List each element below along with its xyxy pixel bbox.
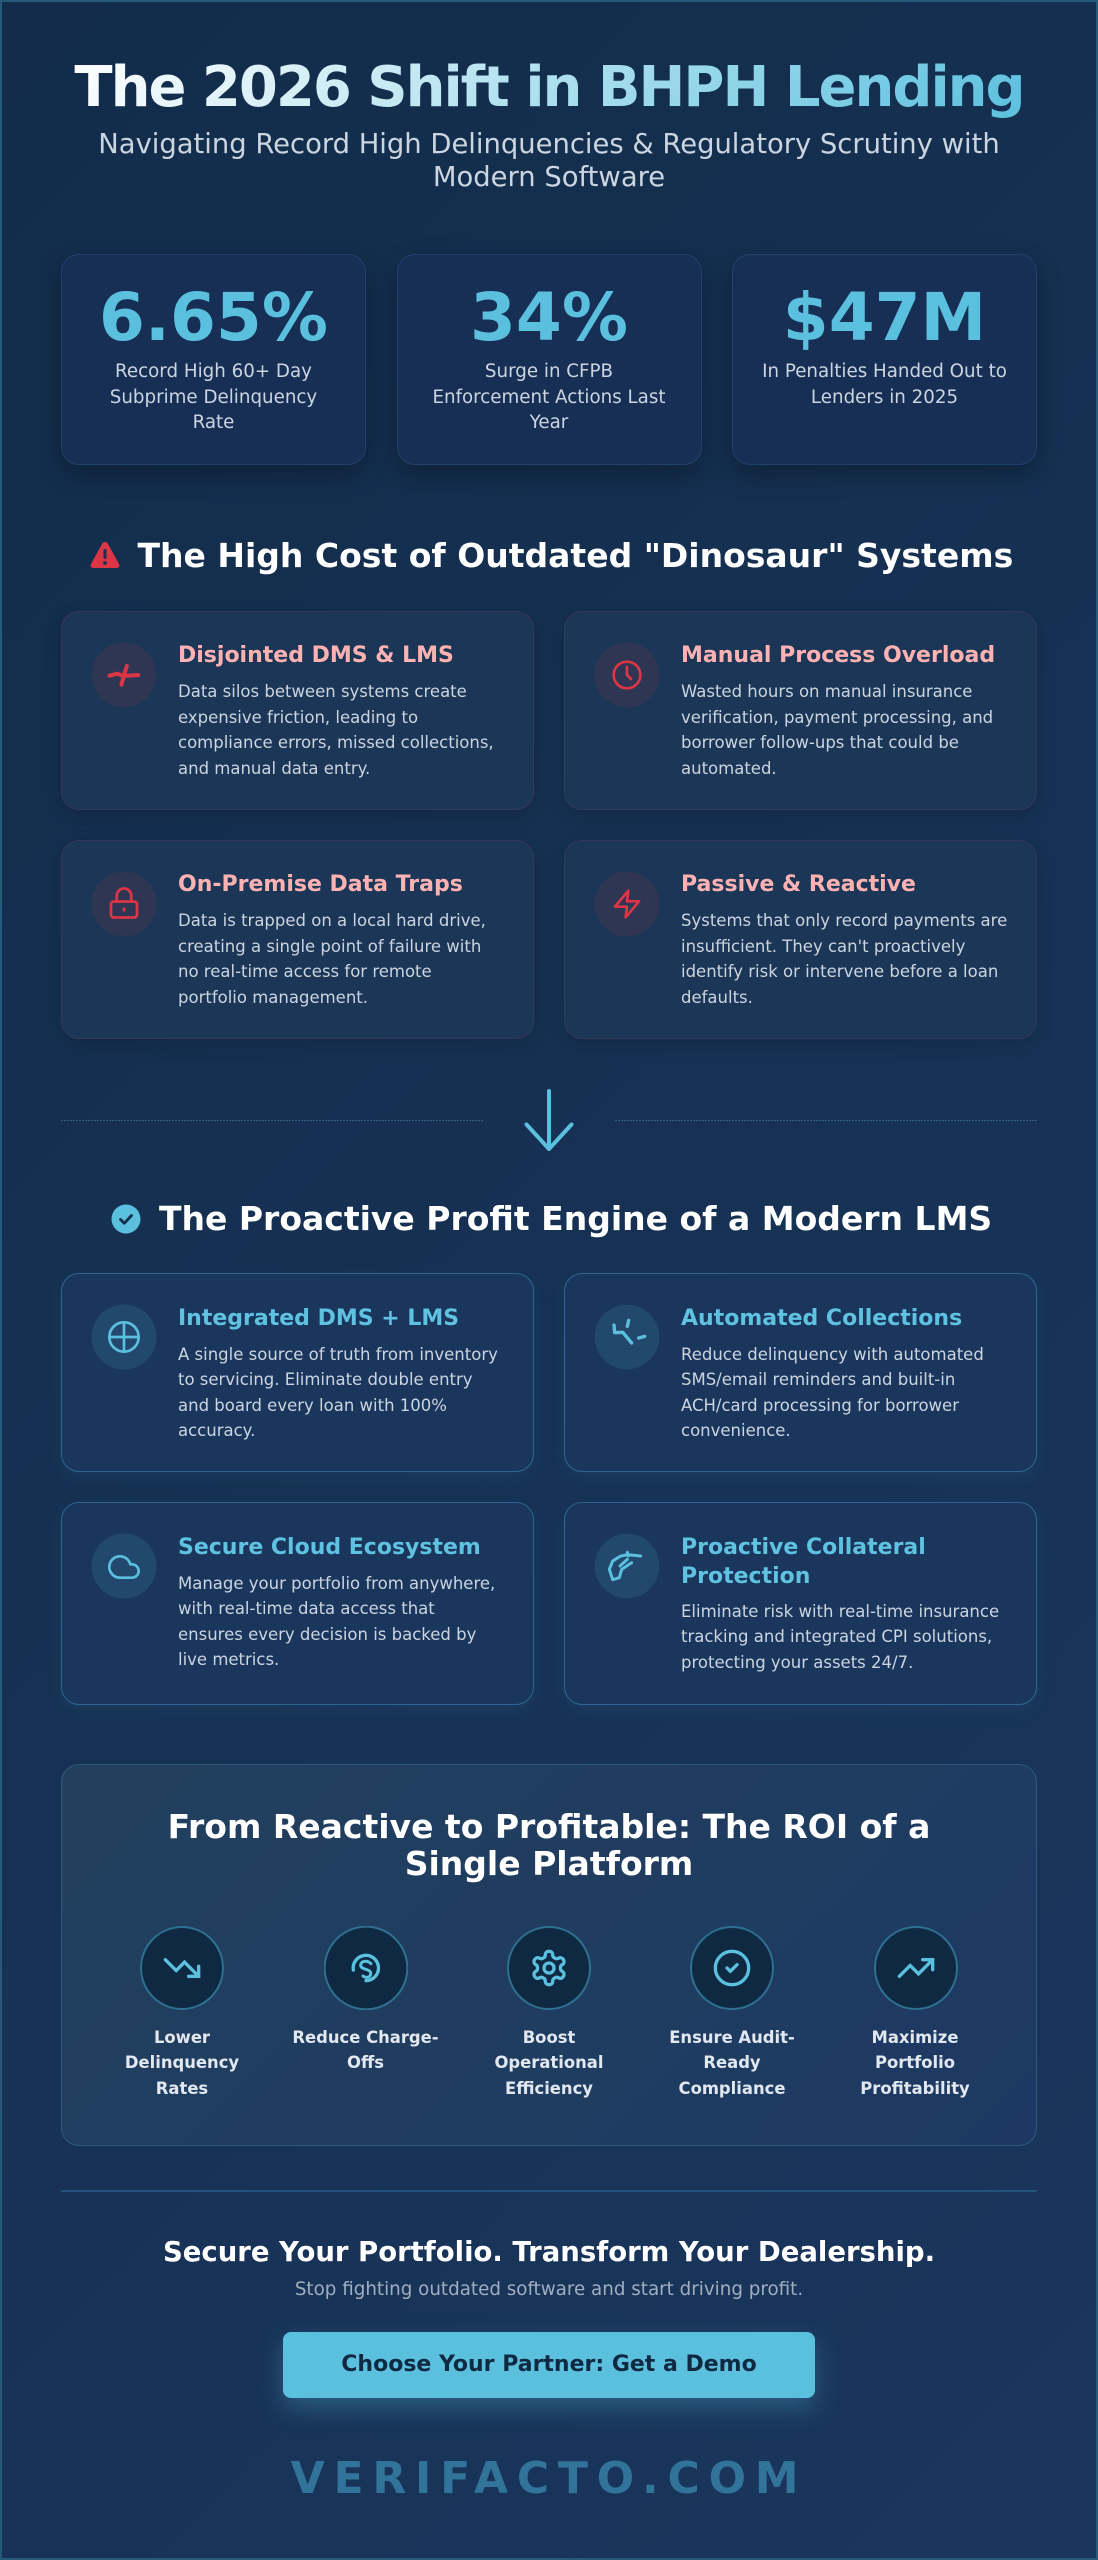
panel: Secure Cloud Ecosystem: ensures every decision is backed by (178, 1625, 476, 1644)
icon: lightning bolt (594, 872, 660, 936)
label: audit-ready compliance: Ready (703, 2053, 761, 2072)
label: lower delinquency (125, 2028, 239, 2098)
title: The 2026 Shift in BHPH Lending (74, 55, 1024, 120)
panel: On-Premise Data Traps: Data is trapped on a local hard drive, (178, 911, 486, 930)
stat card: delinquency: Record High 60+ Day (115, 361, 312, 382)
label: boost efficiency: Operational (494, 2053, 604, 2072)
panel: Automated Collections: ACH/card processing for borrower (681, 1396, 959, 1415)
panel: Manual Process Overload (564, 611, 1037, 810)
label: boost efficiency (494, 2028, 604, 2098)
label: maximize profitability: Maximize (872, 2028, 958, 2047)
panel: On-Premise Data Traps: no real-time access for remote (178, 962, 432, 981)
stat card: delinquency: 6.65% (99, 278, 328, 356)
CTA button (283, 2332, 815, 2398)
panel: On-Premise Data Traps: On-Premise Data Traps (178, 872, 463, 896)
panel: Integrated DMS + LMS: and board every loan with 100% (178, 1396, 447, 1415)
heading: proactive profit engine section: The Proactive Profit Engine of a Modern LMS (159, 1199, 992, 1238)
CTA subtext: Stop fighting outdated software and start driving profit. (295, 2279, 803, 2300)
panel: Disjointed DMS & LMS: and manual data entry. (178, 759, 370, 778)
panel: Integrated DMS + LMS: A single source of truth from inventory (178, 1344, 498, 1364)
icon: dollar spiral (324, 1926, 408, 2010)
stat card: delinquency: Rate (193, 412, 234, 433)
icon: cloud (92, 1534, 156, 1598)
stat card: delinquency (61, 254, 366, 465)
panel: Proactive Collateral Protection: Proactive Collateral (681, 1534, 926, 1560)
icon: broken message strokes (594, 1304, 660, 1370)
stat card: CFPB enforcement: Year (530, 412, 568, 433)
panel: Automated Collections: convenience. (681, 1421, 791, 1440)
panel: Proactive Collateral Protection: Eliminate risk with real-time insurance (681, 1602, 999, 1620)
panel: Automated Collections: SMS/email reminders and built-in (681, 1370, 955, 1389)
label: maximize profitability: Profitability (860, 2079, 970, 2098)
panel: Manual Process Overload: Manual Process Overload (681, 642, 995, 668)
panel: Passive & Reactive: insufficient. They can't proactively (681, 937, 965, 956)
icon: alert triangle (90, 542, 120, 568)
label: lower delinquency: Rates (156, 2079, 208, 2098)
label: reduce charge-offs: Reduce Charge- (292, 2028, 439, 2047)
panel: Passive & Reactive: Systems that only record payments are (681, 911, 1007, 930)
label: audit-ready compliance: Ensure Audit- (669, 2028, 795, 2047)
panel: Secure Cloud Ecosystem: live metrics. (178, 1650, 279, 1669)
panel: Automated Collections: Reduce delinquency with automated (681, 1344, 984, 1364)
panel: Secure Cloud Ecosystem: with real-time data access that (178, 1599, 435, 1618)
label: audit-ready compliance: Compliance (679, 2079, 785, 2098)
icon: circled cross (92, 1304, 156, 1370)
panel: Integrated DMS + LMS: Integrated DMS + LMS (178, 1306, 459, 1330)
panel: Disjointed DMS & LMS: expensive friction, leading to (178, 708, 418, 727)
icon: disconnected cross (92, 642, 156, 708)
CTA heading: Secure Your Portfolio. Transform Your Dealership. (163, 2236, 935, 2268)
label: reduce charge-offs: Offs (347, 2053, 384, 2072)
panel: Secure Cloud Ecosystem: Manage your portfolio from anywhere, (178, 1574, 495, 1592)
panel: Passive & Reactive: defaults. (681, 988, 753, 1007)
label: lower delinquency: Lower (154, 2028, 210, 2047)
label: boost efficiency: Efficiency (505, 2079, 593, 2098)
panel: Secure Cloud Ecosystem (61, 1502, 534, 1705)
panel: On-Premise Data Traps (61, 840, 534, 1039)
panel: Disjointed DMS & LMS: Disjointed DMS & LMS (178, 642, 454, 668)
panel: Passive & Reactive: Passive & Reactive (681, 872, 916, 896)
stat card: penalties (732, 254, 1037, 465)
panel: Proactive Collateral Protection: tracking and integrated CPI solutions, (681, 1627, 992, 1646)
label: reduce charge-offs (292, 2028, 439, 2072)
heading: ROI: From Reactive to Profitable: The ROI of a (168, 1807, 930, 1846)
brand footer: VERIFACTO.COM (291, 2453, 807, 2504)
panel: Manual Process Overload: borrower follow-ups that could be (681, 733, 959, 752)
heading: ROI (168, 1807, 930, 1883)
panel: ROI of a single platform (61, 1764, 1037, 2146)
subtitle (98, 129, 1000, 193)
label: boost efficiency: Boost (523, 2028, 575, 2047)
panel: Proactive Collateral Protection: Protection (681, 1564, 810, 1589)
panel: Manual Process Overload: verification, payment processing, and (681, 708, 993, 727)
panel: Passive & Reactive: identify risk or intervene before a loan (681, 962, 998, 981)
panel: Automated Collections (564, 1273, 1037, 1472)
panel: On-Premise Data Traps: portfolio management. (178, 988, 368, 1007)
label: maximize profitability: Portfolio (875, 2053, 955, 2072)
icon: trending up (874, 1926, 958, 2010)
icon: hand shield (594, 1534, 660, 1598)
icon: trending down (140, 1926, 224, 2010)
panel: Manual Process Overload: automated. (681, 759, 777, 778)
panel: Disjointed DMS & LMS: Data silos between systems create (178, 682, 467, 701)
divider with down arrow (61, 1089, 1037, 1152)
heading: ROI: Single Platform (405, 1844, 693, 1883)
panel: Proactive Collateral Protection (564, 1502, 1037, 1705)
panel: Passive & Reactive (564, 840, 1037, 1039)
panel: Disjointed DMS & LMS (61, 611, 534, 810)
stat card: delinquency: Subprime Delinquency (110, 387, 317, 408)
stat card: CFPB enforcement (396, 254, 702, 465)
icon: gear (507, 1926, 591, 2010)
panel: Secure Cloud Ecosystem: Secure Cloud Ecosystem (178, 1534, 481, 1560)
subtitle: Modern Software (433, 162, 665, 193)
panel: Integrated DMS + LMS (61, 1273, 534, 1472)
label: audit-ready compliance (669, 2028, 795, 2098)
icon: circle check (690, 1926, 774, 2010)
stat card: CFPB enforcement: 34% (470, 278, 628, 356)
label: maximize profitability (860, 2028, 970, 2098)
CTA button: Choose Your Partner: Get a Demo (341, 2352, 757, 2376)
panel: Disjointed DMS & LMS: compliance errors, missed collections, (178, 733, 494, 752)
heading: high cost section: The High Cost of Outdated "Dinosaur" Systems (138, 536, 1013, 574)
icon: lock (92, 872, 156, 936)
panel: Proactive Collateral Protection: protecting your assets 24/7. (681, 1653, 913, 1672)
stat card: CFPB enforcement: Enforcement Actions Last (432, 387, 666, 408)
panel: On-Premise Data Traps: creating a single point of failure with (178, 937, 481, 956)
subtitle: Navigating Record High Delinquencies & Regulatory Scrutiny with (98, 129, 1000, 160)
stat card: penalties: In Penalties Handed Out to (762, 361, 1007, 382)
stat card: CFPB enforcement: Surge in CFPB (485, 361, 613, 382)
icon: clock (594, 642, 660, 708)
icon: check circle (112, 1204, 140, 1234)
panel: Integrated DMS + LMS: accuracy. (178, 1421, 255, 1440)
panel: Automated Collections: Automated Collections (681, 1306, 962, 1330)
stat card: penalties: Lenders in 2025 (811, 387, 958, 408)
label: lower delinquency: Delinquency (125, 2053, 239, 2072)
panel: Manual Process Overload: Wasted hours on manual insurance (681, 682, 972, 701)
panel: Integrated DMS + LMS: to servicing. Eliminate double entry (178, 1370, 473, 1389)
stat card: penalties: $47M (783, 278, 986, 356)
